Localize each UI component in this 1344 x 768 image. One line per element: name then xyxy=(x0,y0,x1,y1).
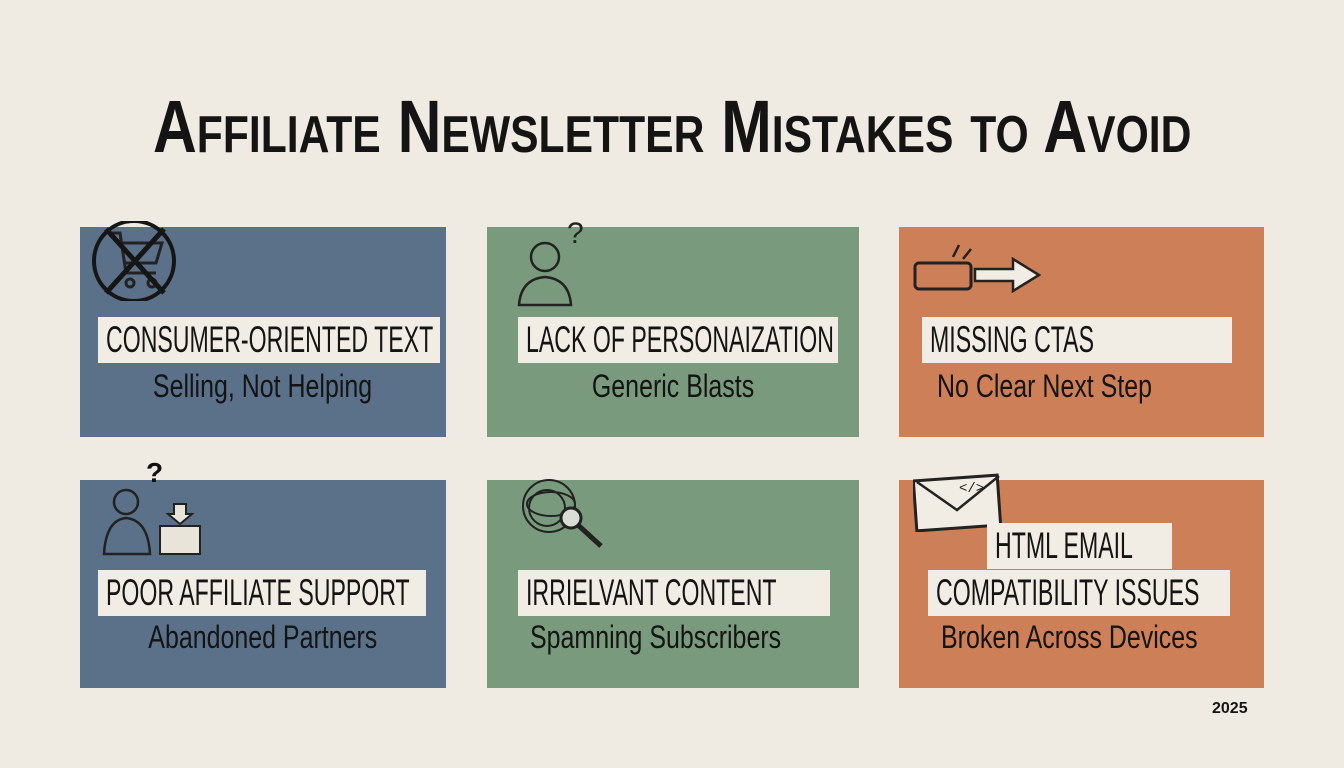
panel: consumer-oriented text xyxy=(80,227,446,437)
label: IRRIELVANT CONTENT xyxy=(526,572,777,613)
icon: broken envelope: </> xyxy=(959,481,984,497)
label xyxy=(922,317,1232,363)
panel: irrelevant content xyxy=(487,480,859,688)
icon: person with question mark: ? xyxy=(567,217,584,250)
icon: broken button arrow xyxy=(914,244,1042,294)
panel: lack of personalization xyxy=(487,227,859,437)
panel: missing ctas xyxy=(899,227,1264,437)
subtitle: Selling, Not Helping xyxy=(153,368,373,404)
icon: tangle with magnifier xyxy=(522,479,603,548)
label: HTML EMAIL xyxy=(995,525,1133,566)
panel: html email compatibility xyxy=(899,480,1264,688)
label: POOR AFFILIATE SUPPORT xyxy=(106,572,410,613)
subtitle: Generic Blasts xyxy=(592,368,754,404)
panel: poor affiliate support xyxy=(80,480,446,688)
icon: crossed cart xyxy=(92,221,176,301)
label: LACK OF PERSONAIZATION xyxy=(526,319,834,360)
label xyxy=(987,523,1172,569)
year: 2025 xyxy=(1212,700,1248,717)
icon: person with question mark xyxy=(518,217,584,306)
subtitle: Spamning Subscribers xyxy=(530,619,781,655)
subtitle: No Clear Next Step xyxy=(937,368,1152,404)
icon: broken envelope xyxy=(913,474,1002,532)
title: Affiliate Newsletter Mistakes to Avoid xyxy=(153,85,1191,168)
label: MISSING CTAS xyxy=(930,319,1094,360)
icon: person with box xyxy=(102,458,201,556)
subtitle: Broken Across Devices xyxy=(941,619,1198,655)
label line 2: COMPATIBILITY ISSUES xyxy=(936,572,1199,613)
subtitle: Abandoned Partners xyxy=(149,619,377,655)
label: CONSUMER-ORIENTED TEXT xyxy=(106,319,433,360)
